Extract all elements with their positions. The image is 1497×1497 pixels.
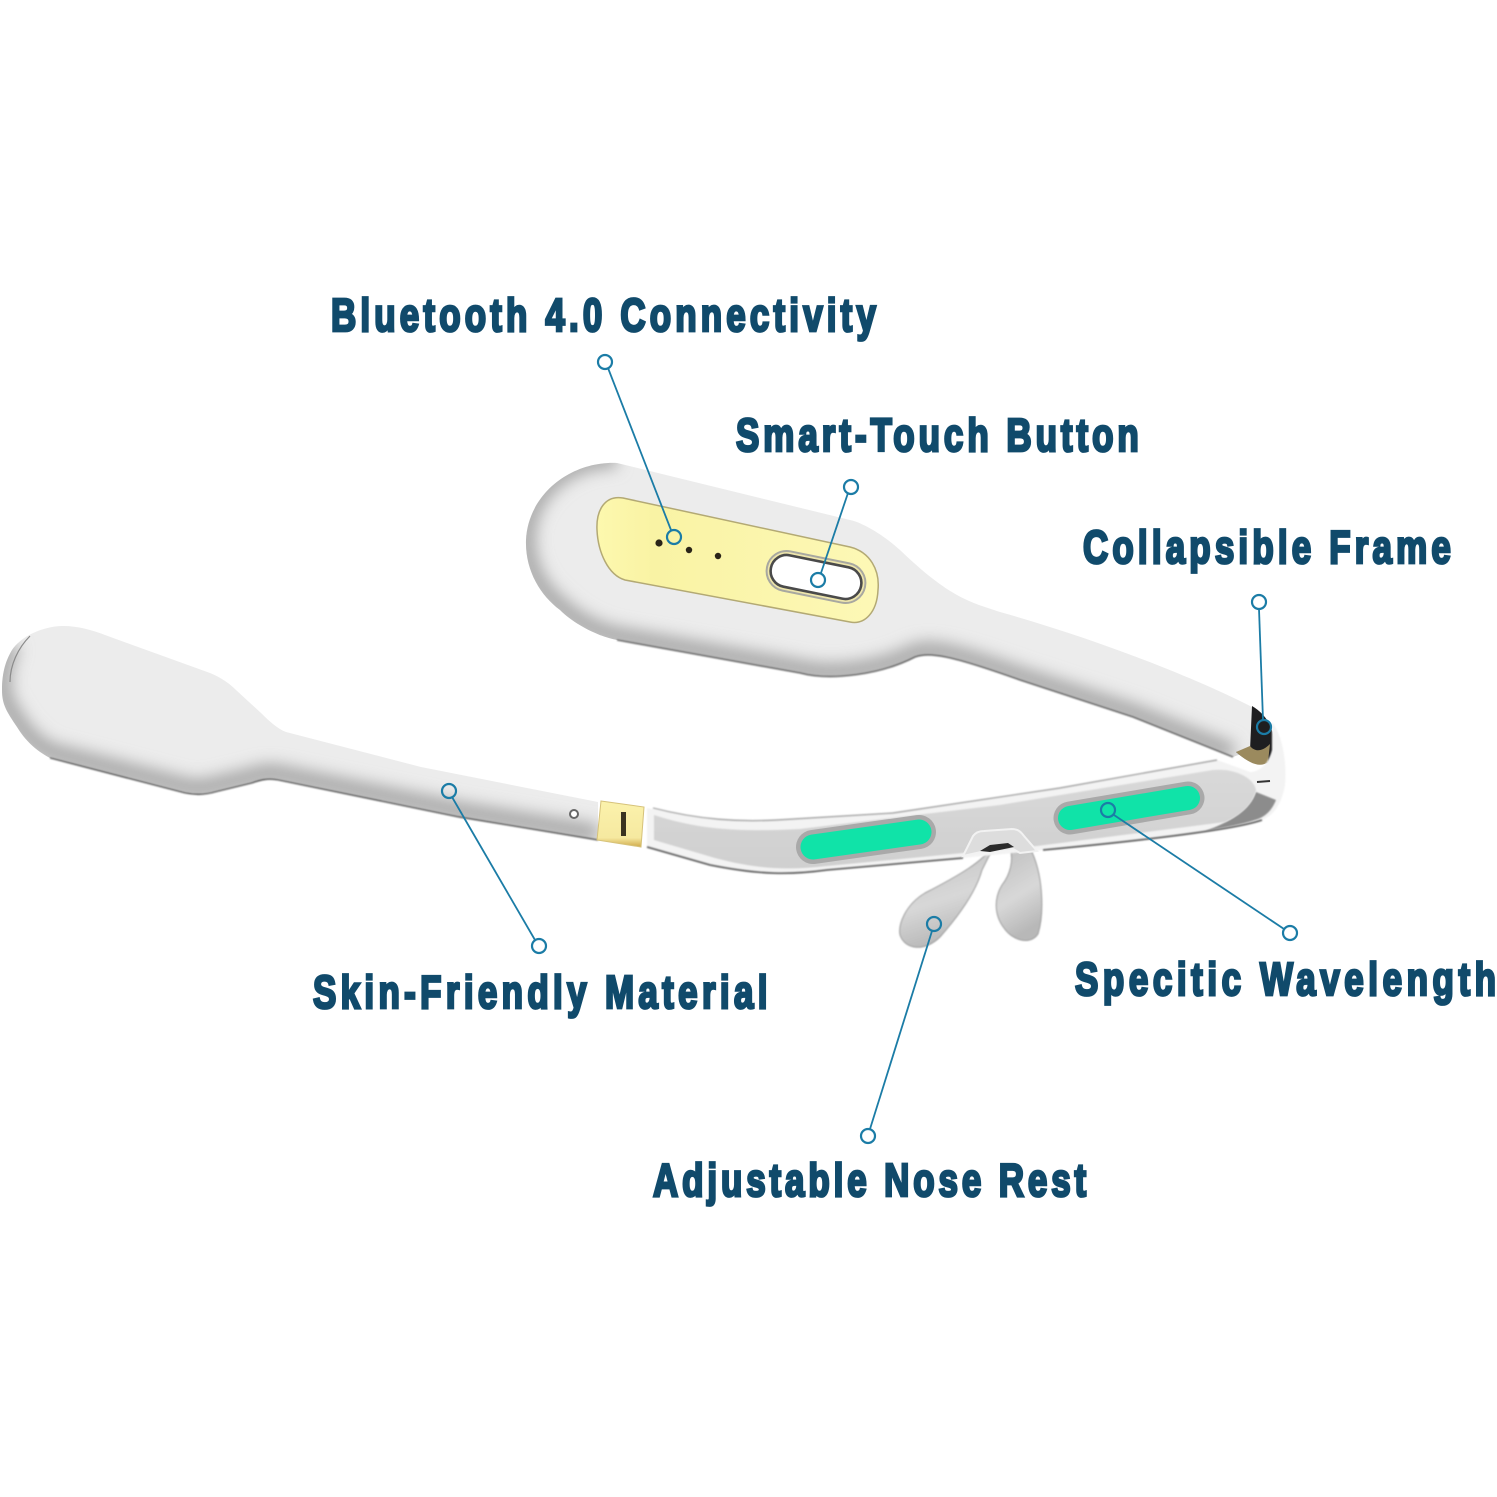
gold hinge plate <box>597 801 644 847</box>
heading: Collapsible Frame: Collapsible Frame <box>1083 521 1451 573</box>
callout: smart-touch button <box>811 480 858 587</box>
heading: Bluetooth 4.0 Connectivity: Bluetooth 4.0 Connectivity <box>331 289 876 341</box>
nose rest pads <box>900 848 1042 947</box>
indicator lights <box>655 539 721 559</box>
callout: specific wavelength <box>1101 803 1297 940</box>
right light pocket <box>1070 798 1188 818</box>
nose bridge <box>963 829 1037 856</box>
yellow control plate <box>597 498 878 622</box>
heading: Skin-Friendly Material: Skin-Friendly Material <box>313 966 767 1018</box>
callout: bluetooth <box>598 355 681 544</box>
front frame <box>647 722 1285 873</box>
glasses device <box>0 440 1285 947</box>
heading: Specitic Wavelength: Specitic Wavelength <box>1075 953 1496 1005</box>
dark underside at the temple <box>1205 792 1276 831</box>
back arm with control paddle <box>526 462 1252 758</box>
small screw <box>570 810 578 818</box>
smart touch button <box>763 547 869 607</box>
heading: Smart-Touch Button: Smart-Touch Button <box>736 409 1139 461</box>
callout: collapsible frame <box>1252 595 1271 734</box>
right green light <box>1070 798 1188 818</box>
inner face <box>654 770 1256 868</box>
left green light <box>813 832 919 847</box>
left light pocket <box>813 832 919 847</box>
callout: skin-friendly material <box>442 784 546 953</box>
left arm with paddle <box>0 610 644 850</box>
metal hinge <box>1236 706 1274 765</box>
bottom edge shadow <box>647 820 1262 873</box>
callout: adjustable nose rest <box>861 917 941 1143</box>
heading: Adjustable Nose Rest: Adjustable Nose Rest <box>653 1154 1087 1206</box>
